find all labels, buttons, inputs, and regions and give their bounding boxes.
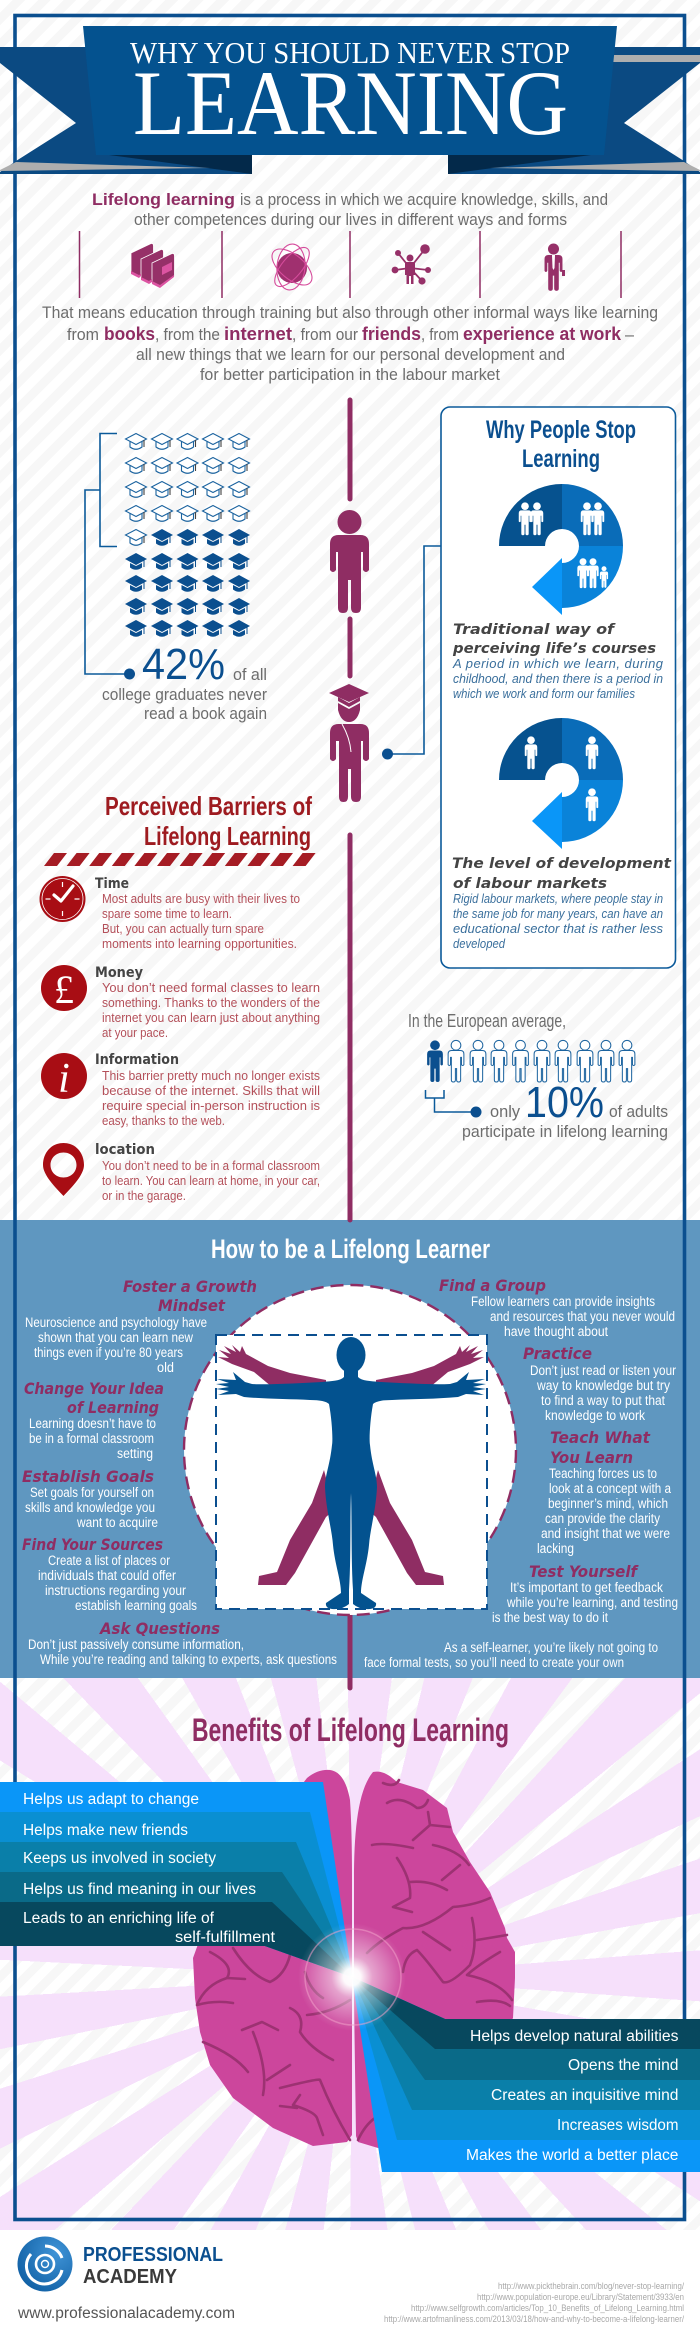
icon: pound	[41, 965, 87, 1012]
tip: teach what you learn: beginner’s mind, which	[548, 1496, 668, 1511]
tip: change your idea of learning: Change Your Idea	[24, 1379, 164, 1398]
barrier: money: internet you can learn just about anything	[102, 1010, 320, 1025]
heading: labour markets: of labour markets	[453, 876, 607, 892]
tip: find your sources: instructions regarding your	[45, 1583, 186, 1598]
people pictogram	[427, 1040, 635, 1082]
banner grey strips	[0, 55, 700, 171]
ribbons: left benefits: self-fulfillment	[175, 1929, 276, 1946]
tip: teach what you learn: Teaching forces us to	[549, 1466, 657, 1481]
ribbons: left benefits: Helps us adapt to change	[23, 1791, 199, 1808]
banner right tail	[448, 47, 700, 174]
title banner	[0, 26, 700, 174]
tip: practice: knowledge to work	[545, 1408, 645, 1423]
tip: change your idea of learning: be in a formal classroom	[29, 1431, 154, 1446]
tip: teach what you learn: lacking	[537, 1541, 574, 1556]
white footer background	[0, 2230, 700, 2333]
logo: professional academy: ACADEMY	[83, 2266, 178, 2288]
barrier: money: something. Thanks to the wonders of the	[102, 995, 320, 1010]
ribbons: left benefits: Helps us find meaning in our lives	[23, 1881, 256, 1898]
maroon raised arms and legs	[218, 1345, 484, 1585]
barrier: information	[41, 1052, 320, 1128]
icon: graduate	[329, 684, 369, 802]
intro paragraph: –	[625, 325, 635, 344]
barrier: time: spare some time to learn.	[102, 906, 232, 921]
tip: ask questions	[28, 1619, 337, 1667]
barrier: information: because of the internet. Skills that will	[102, 1083, 320, 1098]
statistic: 10%: 10%	[525, 1078, 604, 1127]
body: labour markets: educational sector that is rather less	[453, 921, 664, 936]
banner left shadow	[109, 155, 252, 174]
body: labour markets	[453, 891, 664, 951]
panel heading	[486, 416, 636, 473]
left hemisphere	[193, 1770, 352, 2146]
intro text: other competences during our lives in different ways and forms	[134, 210, 567, 229]
tip: change your idea of learning	[24, 1379, 164, 1461]
panel heading: Learning	[522, 445, 600, 473]
ribbons: right benefits: Increases wisdom	[557, 2117, 678, 2134]
tip: test yourself: It’s important to get feedback	[510, 1580, 663, 1595]
white square	[216, 1335, 487, 1609]
connector: graduate to panel	[382, 546, 441, 760]
barrier: money: You don’t need formal classes to learn	[102, 980, 320, 995]
tip: establish goals: Establish Goals	[22, 1467, 154, 1486]
barrier: money: Money	[95, 965, 143, 981]
heading: perceived barriers: Perceived Barriers of	[105, 791, 312, 821]
barrier: information: Information	[95, 1052, 179, 1068]
heading: perceived barriers: Lifelong Learning	[144, 821, 311, 851]
tip: ask questions: While you’re reading and talking to experts, ask questions	[40, 1652, 337, 1667]
icon: map pin	[43, 1143, 84, 1196]
tip: practice: to find a way to put that	[541, 1393, 665, 1408]
statistic: 10%: only	[490, 1102, 520, 1121]
background: blue section	[0, 1220, 700, 1678]
statistic: 10%: of adults	[609, 1102, 668, 1121]
icon row dividers	[80, 231, 621, 298]
icon: person	[330, 510, 369, 613]
statistic: 42%: college graduates never	[102, 685, 267, 704]
tip: establish goals: want to acquire	[76, 1515, 158, 1530]
tip: change your idea of learning: setting	[117, 1446, 153, 1461]
background: pink sunburst section	[0, 1678, 700, 2230]
intro paragraph	[42, 303, 658, 384]
brain folds	[197, 1780, 512, 2140]
tip: find your sources: Find Your Sources	[22, 1535, 163, 1554]
heading: labour markets: The level of development	[452, 856, 672, 872]
title line 2: LEARNING	[133, 52, 568, 154]
heading: how to be a lifelong learner: How to be a Lifelong Learner	[211, 1234, 490, 1264]
icon: worker	[545, 243, 565, 291]
heading: labour markets	[452, 856, 672, 892]
ribbons: right benefits: Helps develop natural abilities	[470, 2028, 679, 2045]
tip: practice: Practice	[523, 1344, 592, 1363]
bracket connector: 10%	[426, 1090, 482, 1118]
barrier: time: Time	[95, 876, 129, 892]
statistic heading: european average: In the European average,	[408, 1011, 566, 1031]
intro text: is a process in which we acquire knowledge, skills, and	[240, 190, 608, 209]
tip: find a group	[439, 1276, 675, 1339]
ribbons: left benefits: Leads to an enriching life of	[23, 1910, 215, 1927]
body: traditional way: A period in which we learn, during	[452, 656, 664, 671]
barrier: time: moments into learning opportunities.	[102, 936, 297, 951]
tip: ask questions: Ask Questions	[98, 1619, 220, 1638]
tip: teach what you learn: look at a concept with a	[549, 1481, 671, 1496]
tip: teach what you learn	[537, 1428, 671, 1556]
heading: traditional way	[452, 622, 656, 657]
logo: professional academy	[18, 2236, 223, 2292]
circular arrow: labour markets	[499, 718, 623, 849]
heading: traditional way: perceiving life’s courses	[452, 641, 656, 657]
barrier: location: or in the garage.	[102, 1188, 186, 1203]
tip: find a group: have thought about	[504, 1324, 608, 1339]
tip: test yourself: while you’re learning, and testing	[506, 1595, 678, 1610]
brain	[193, 1770, 515, 2148]
tip: find your sources	[22, 1535, 197, 1613]
barrier: location: to learn. You can learn at home, in your car,	[102, 1173, 320, 1188]
tip: practice: way to knowledge but try	[536, 1378, 670, 1393]
statistic: 10%	[462, 1078, 668, 1141]
white circle	[184, 1285, 516, 1615]
blue body	[216, 1337, 486, 1609]
body: traditional way: childhood, and then there is a period in	[453, 671, 663, 686]
statistic: 42%: of all	[233, 665, 267, 684]
tip: foster a growth mindset: things even if you’re 80 years	[34, 1345, 183, 1360]
tip: test yourself: Test Yourself	[529, 1562, 639, 1581]
body: labour markets: Rigid labour markets, where people stay in	[453, 891, 663, 906]
barrier: information: This barrier pretty much no longer exists	[102, 1068, 320, 1083]
title line 1: WHY YOU SHOULD NEVER STOP	[130, 36, 570, 70]
barrier: time	[40, 876, 300, 951]
body: labour markets: developed	[453, 936, 506, 951]
tip: find a group: Fellow learners can provide insights	[471, 1294, 655, 1309]
barrier: location: You don’t need to be in a formal classroom	[102, 1158, 320, 1173]
bracket connector: graduates	[85, 434, 128, 674]
statistic: 42%: 42%	[142, 640, 225, 689]
tip: find your sources: Create a list of places or	[48, 1553, 170, 1568]
intro paragraph: friends	[362, 324, 421, 344]
ribbons: right benefits: Opens the mind	[568, 2057, 678, 2074]
intro text	[92, 190, 608, 229]
striped divider	[44, 853, 316, 866]
panel heading: Why People Stop	[486, 416, 636, 444]
barrier: money: at your pace.	[102, 1025, 168, 1040]
tip: find your sources: individuals that could offer	[38, 1568, 176, 1583]
statistic: 42%	[102, 640, 267, 723]
tip: test yourself: face formal tests, so you’ll need to create your own	[364, 1655, 624, 1670]
tip: foster a growth mindset: old	[157, 1360, 174, 1375]
barrier: money	[41, 965, 320, 1040]
heading: perceived barriers	[105, 791, 312, 851]
intro text: Lifelong learning	[92, 190, 235, 209]
banner right shadow	[448, 155, 591, 174]
intro paragraph: for better participation in the labour market	[200, 365, 500, 384]
source links	[384, 2281, 684, 2324]
tip: foster a growth mindset: Mindset	[158, 1296, 226, 1315]
tip: teach what you learn: You Learn	[550, 1448, 633, 1467]
ribbons: left benefits	[0, 1782, 352, 1977]
tip: test yourself	[364, 1562, 678, 1670]
vitruvian figure	[184, 1285, 516, 1615]
ribbons: left benefits: Keeps us involved in society	[23, 1850, 216, 1867]
tip: foster a growth mindset: Neuroscience and psychology have	[25, 1315, 207, 1330]
tip: test yourself: is the best way to do it	[492, 1610, 608, 1625]
icon: clock	[40, 876, 86, 922]
statistic: 10%: participate in lifelong learning	[462, 1122, 668, 1141]
ribbons: right benefits: Makes the world a better place	[466, 2147, 678, 2164]
banner centre	[83, 26, 617, 155]
tip: teach what you learn: and insight that we were	[541, 1526, 670, 1541]
tip: establish goals: Set goals for yourself on	[30, 1485, 154, 1500]
icon: info: i	[58, 1056, 70, 1102]
website url: www.professionalacademy.com	[17, 2305, 235, 2322]
barrier: time: But, you can actually turn spare	[102, 921, 264, 936]
body: traditional way	[452, 656, 664, 701]
intro paragraph: , from our	[292, 325, 358, 344]
intro paragraph: all new things that we learn for our personal development and	[136, 345, 565, 364]
body: labour markets: the same job for many years, can have an	[453, 906, 663, 921]
tip: practice	[523, 1344, 676, 1423]
icon: books	[131, 243, 174, 288]
tip: teach what you learn: Teach What	[550, 1428, 651, 1447]
intro paragraph: That means education through training but also through other informal ways like learning	[42, 303, 658, 322]
tip: find your sources: establish learning goals	[75, 1598, 197, 1613]
tip: establish goals: skills and knowledge you	[25, 1500, 155, 1515]
tip: establish goals	[22, 1467, 158, 1530]
intro paragraph: internet	[224, 324, 292, 344]
tip: foster a growth mindset	[25, 1277, 257, 1375]
background: diagonal stripes	[0, 0, 700, 1220]
body: traditional way: which we work and form our families	[453, 686, 635, 701]
panel: why people stop learning	[441, 407, 676, 968]
logo mark	[18, 2236, 72, 2292]
intro paragraph: from	[67, 325, 99, 344]
icon: friends network	[392, 244, 431, 285]
barrier: information: require special in-person instruction is	[102, 1098, 320, 1113]
graduation caps pictogram	[125, 434, 250, 637]
tip: change your idea of learning: of Learning	[67, 1398, 159, 1417]
circular arrow: life courses	[499, 484, 623, 615]
icon: globe	[266, 242, 318, 292]
tip: foster a growth mindset: Foster a Growth	[123, 1277, 257, 1296]
icon: pound: £	[54, 967, 74, 1012]
barrier: location	[43, 1142, 320, 1203]
tip: find a group: Find a Group	[439, 1276, 546, 1295]
barrier: time: Most adults are busy with their lives to	[102, 891, 300, 906]
tip: teach what you learn: can provide the clarity	[545, 1511, 660, 1526]
intro paragraph: experience at work	[463, 324, 622, 344]
right hemisphere	[354, 1772, 515, 2148]
tip: practice: Don’t just read or listen your	[530, 1363, 676, 1378]
tip: change your idea of learning: Learning doesn’t have to	[29, 1416, 156, 1431]
tip: test yourself: As a self-learner, you’re likely not going to	[444, 1640, 658, 1655]
statistic: 42%: read a book again	[144, 704, 267, 723]
ribbons: left benefits: Helps make new friends	[23, 1822, 188, 1839]
icon: info	[41, 1053, 87, 1102]
intro paragraph: books	[104, 324, 155, 344]
bullet dot	[124, 668, 135, 680]
intro paragraph: , from the	[155, 325, 220, 344]
banner left tail	[0, 47, 252, 174]
tip: ask questions: Don’t just passively consume information,	[28, 1637, 244, 1652]
logo: professional academy: PROFESSIONAL	[83, 2244, 223, 2266]
intro paragraph: , from	[421, 325, 459, 344]
heading: benefits: Benefits of Lifelong Learning	[192, 1712, 509, 1748]
barrier: location: location	[95, 1142, 155, 1158]
barrier: information: easy, thanks to the web.	[102, 1113, 225, 1128]
tip: foster a growth mindset: shown that you can learn new	[38, 1330, 193, 1345]
central timeline	[348, 400, 352, 1688]
ribbons: right benefits: Creates an inquisitive mind	[491, 2087, 678, 2104]
brain light flare	[298, 1923, 406, 2031]
heading: traditional way: Traditional way of	[453, 622, 616, 638]
ribbons: right benefits	[352, 1977, 700, 2172]
tip: find a group: and resources that you never would	[490, 1309, 675, 1324]
